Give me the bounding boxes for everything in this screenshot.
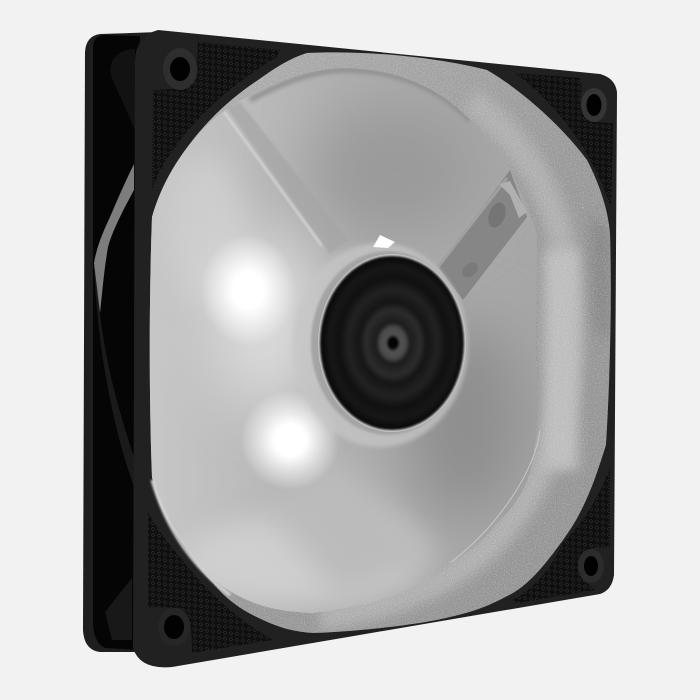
corner pad: top right bbox=[515, 73, 613, 208]
translucent outer ring bbox=[140, 40, 620, 640]
rear curved band bbox=[94, 263, 135, 490]
rear blade sliver bbox=[94, 164, 134, 313]
left bright glow bbox=[210, 230, 320, 410]
corner pad: bottom left bbox=[148, 512, 273, 653]
LED light: upper bbox=[206, 240, 290, 338]
rear lower bracket bbox=[105, 578, 132, 640]
rear interior corner detail bbox=[110, 49, 135, 130]
strut tab bbox=[499, 181, 527, 218]
ring shadow patch bbox=[590, 215, 610, 340]
upper left light zone bbox=[165, 155, 245, 305]
lower light zone bbox=[180, 515, 420, 605]
corner pad: bottom right bbox=[513, 467, 610, 603]
blade shading bbox=[284, 472, 410, 590]
corner pad: top left bbox=[152, 42, 280, 190]
hub bbox=[292, 243, 468, 447]
hub outer collar bbox=[292, 243, 468, 447]
hub rim highlight bbox=[318, 254, 466, 432]
mounting hole: top left bbox=[163, 48, 197, 90]
hub top white chip bbox=[373, 235, 395, 248]
strut edge bbox=[438, 178, 507, 267]
ring lighter band bbox=[320, 100, 570, 618]
ring inner rim highlight bbox=[450, 430, 540, 563]
rear frame of fan bbox=[83, 32, 160, 652]
product illustration: case fan bbox=[83, 30, 617, 668]
front frame bbox=[133, 30, 617, 667]
hub inner collar bbox=[311, 251, 465, 435]
ring grain bbox=[140, 40, 620, 640]
mounting hole: top right bbox=[581, 88, 607, 122]
hub centre bbox=[389, 338, 397, 348]
ring lower-left highlight bbox=[152, 480, 230, 595]
top inner shadow bbox=[250, 70, 470, 120]
upper-right strut bbox=[438, 170, 527, 300]
inner disc bbox=[140, 60, 550, 620]
strut highlight bbox=[224, 112, 322, 246]
LED light: lower bbox=[244, 395, 336, 486]
upper-left strut bbox=[228, 102, 337, 252]
hub face bbox=[320, 256, 464, 430]
lower-right shadow bbox=[405, 320, 525, 520]
mounting hole: bottom right bbox=[578, 549, 604, 583]
mounting hole: bottom left bbox=[158, 608, 190, 646]
ring side highlight bbox=[544, 250, 578, 470]
strut lower notch bbox=[459, 260, 481, 280]
disc right edge bbox=[531, 230, 537, 470]
strut cable clip bbox=[485, 200, 509, 230]
upper shadow bbox=[310, 100, 480, 240]
